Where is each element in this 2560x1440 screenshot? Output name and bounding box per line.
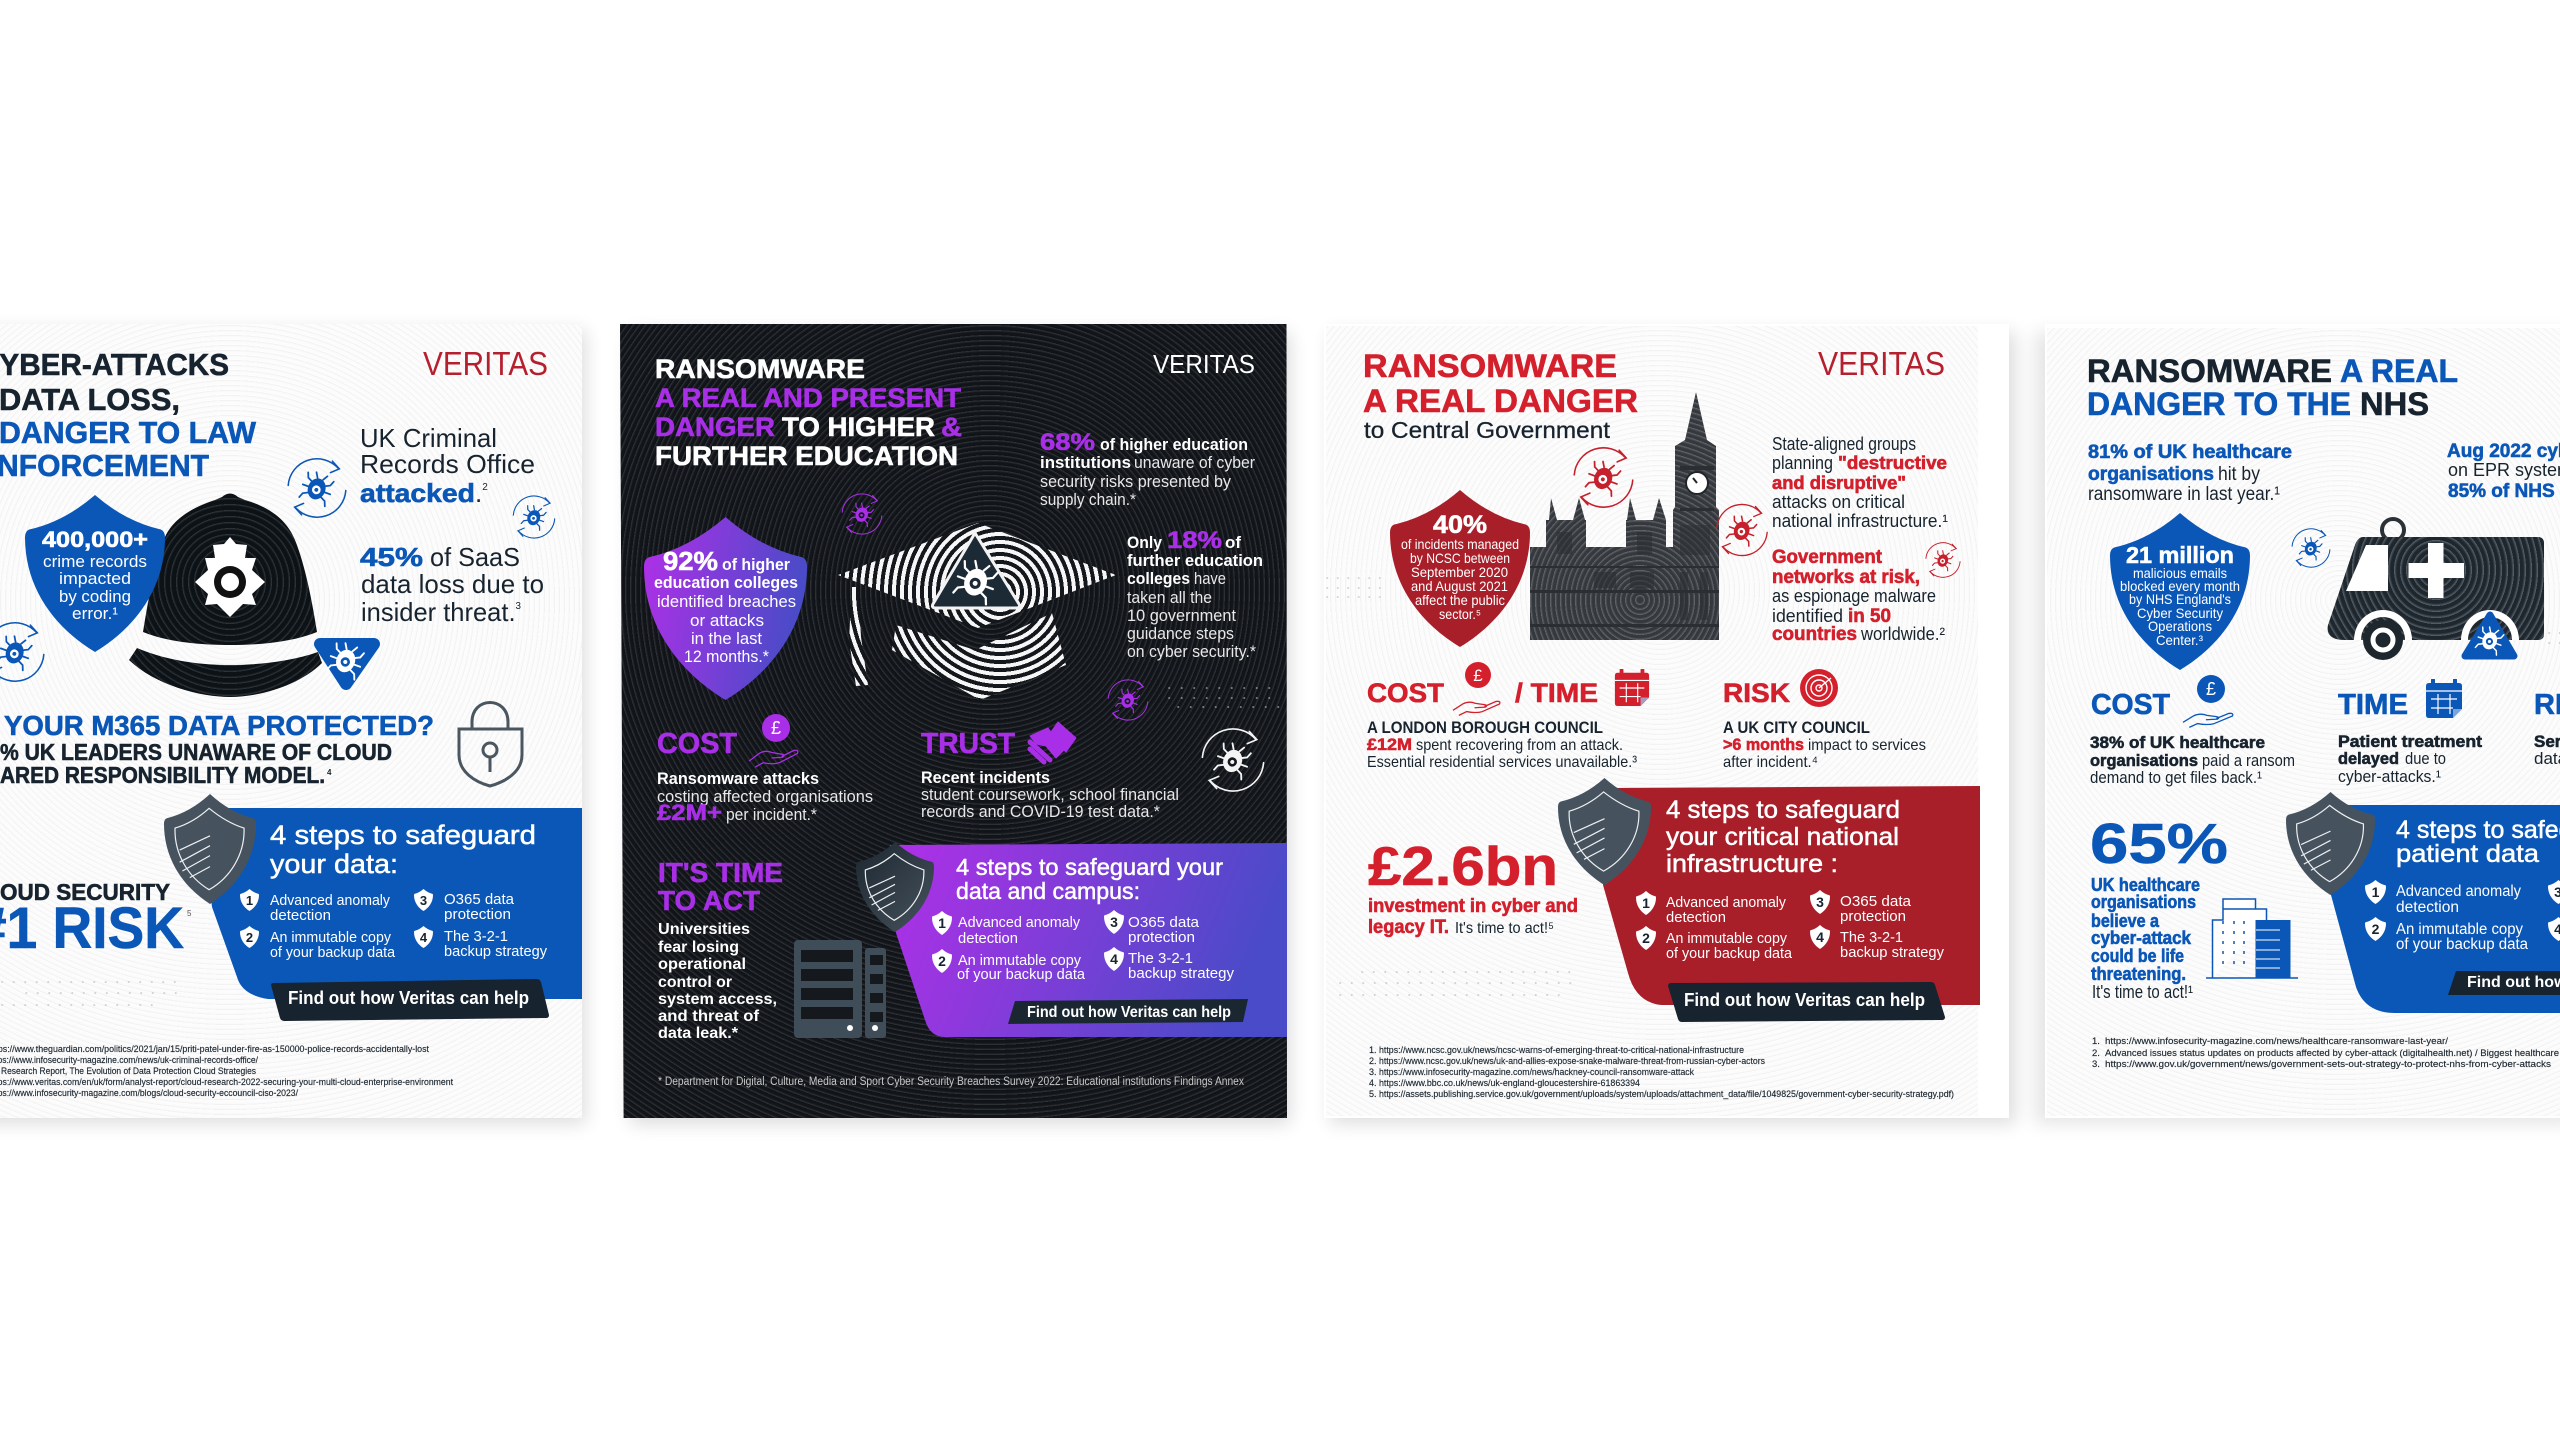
panel: safeguard steps: An immutable copy (1666, 930, 1787, 947)
panel: central government infographic (1324, 324, 2016, 1124)
text block: government networks: as espionage malware (1772, 586, 1936, 606)
footnotes: https://www.infosecurity-magazine.com/news/healthcare-ransomware-last-year/ (2105, 1036, 2448, 1047)
title: DANGER TO LAW (0, 415, 257, 450)
text block: 18 percent: 18% (1167, 527, 1222, 554)
section: cost: demand to get files back.¹ (2090, 768, 2262, 787)
text block: records office attacked: UK Criminal (360, 423, 497, 453)
icon: warning triangle with bug (320, 640, 374, 684)
title: & (941, 412, 962, 442)
title: to Central Government (1364, 417, 1611, 443)
icon: padlock (459, 702, 522, 786)
text block: 68 percent: supply chain.* (1040, 490, 1136, 509)
shield: crime records stat: impacted (59, 569, 131, 588)
panel: safeguard steps: The 3-2-1 (1840, 929, 1903, 946)
section: time to act: fear losing (658, 939, 739, 956)
text block: 18 percent: Only (1127, 533, 1162, 552)
section: time to act: IT'S TIME (658, 857, 783, 888)
section: time (2338, 680, 2482, 786)
text block: 18 percent: of (1225, 533, 1241, 552)
panel: safeguard steps: An immutable copy (2396, 921, 2523, 938)
text block: 18 percent: guidance steps (1127, 624, 1234, 643)
panel: NHS infographic (2035, 324, 2560, 1124)
text block: UK leaders unaware: ARED RESPONSIBILITY MODEL. (0, 762, 325, 788)
panel: safeguard steps: 4 (420, 930, 428, 945)
icon: Big Ben and Parliament (1530, 392, 1719, 640)
panel: safeguard steps: detection (958, 930, 1018, 947)
panel: safeguard steps (856, 842, 1287, 1037)
title (2087, 353, 2458, 422)
title: NHS (2360, 386, 2429, 422)
section: time: TIME (2338, 689, 2408, 721)
shield: 40 percent: sector.⁵ (1439, 606, 1481, 622)
title: DANGER (655, 412, 775, 442)
title: TO HIGHER (782, 412, 935, 442)
section: time: Patient treatment (2338, 732, 2482, 751)
text block: 18 percent (1127, 527, 1263, 661)
icon: bug ring white (1202, 729, 1264, 791)
shield: 21 million: 21 million (2126, 542, 2234, 568)
section: time to act: operational (658, 956, 746, 973)
section: cost and time: / TIME (1515, 678, 1598, 708)
text block: 65 percent (2090, 812, 2228, 1002)
text block: 81 percent: hit by (2218, 464, 2260, 485)
shield: 92 percent: of higher (722, 555, 790, 574)
panel: safeguard steps: of your backup data (957, 966, 1086, 983)
text block: government networks: identified (1772, 606, 1843, 626)
text block: records office attacked: attacked . (360, 478, 482, 508)
text block: government networks: Government (1772, 547, 1883, 568)
icon: bug ring (288, 459, 346, 517)
panel: safeguard steps: 4 (1816, 929, 1824, 945)
title: DANGER TO THE (2087, 386, 2351, 422)
text block: government networks: in 50 (1848, 606, 1891, 627)
panel: safeguard steps: 3 (420, 893, 427, 908)
icon: bug ring (1574, 448, 1633, 507)
footnotes: Advanced issues status updates on products affected by cyber-attack (digitalhealth.net) / Biggest healthcare (2105, 1048, 2559, 1059)
logo: Veritas: VERITAS (1818, 345, 1945, 382)
text block: UK leaders unaware: 4 (327, 768, 332, 777)
icon: building (2206, 899, 2298, 978)
panel: safeguard steps (164, 794, 582, 1021)
text block: state-aligned groups: national infrastructure.¹ (1772, 511, 1948, 531)
footnotes: 2. (2092, 1048, 2100, 1059)
panel: safeguard steps: 4 steps to safeguard your (956, 854, 1223, 880)
section: cost (2090, 675, 2295, 787)
panel: safeguard steps: The 3-2-1 (444, 928, 508, 945)
panel: safeguard steps: O365 data (1128, 914, 1200, 931)
footnotes: https://www.ncsc.gov.uk/news/uk-and-allies-expose-snake-malware-threat-from-russian-cyber-actors (1379, 1056, 1765, 1066)
text block: 65 percent: 65% (2090, 812, 2228, 876)
section: time to act (658, 857, 783, 1042)
section: cost and time: £ (1473, 666, 1483, 685)
panel: safeguard steps: 1 (2372, 884, 2380, 900)
footnotes: https://www.theguardian.com/politics/2021/jan/15/priti-patel-under-fire-as-150000-police-records-accidentally-lost (0, 1044, 429, 1054)
text block: SaaS data loss: 3 (516, 601, 521, 612)
footnotes: 3. (1369, 1067, 1377, 1077)
panel: safeguard steps: An immutable copy (270, 929, 391, 946)
text block: 65 percent: organisations (2091, 892, 2196, 912)
icon: ambulance (2328, 519, 2544, 660)
panel: safeguard steps: 1 (246, 893, 253, 908)
shield: crime records stat: error.¹ (72, 604, 118, 623)
text block: 18 percent: on cyber security.* (1127, 642, 1256, 661)
panel: safeguard steps: 2 (2372, 921, 2380, 937)
section: time: delayed (2338, 749, 2399, 768)
text block: records office attacked: Records Office (360, 449, 535, 479)
section: trust: student coursework, school financial (921, 785, 1179, 804)
panel: law enforcement infographic (0, 324, 586, 1124)
footnotes (2092, 1036, 2559, 1070)
title: DATA LOSS, (0, 382, 180, 417)
footnotes: https://www.gov.uk/government/news/government-sets-out-strategy-to-protect-nhs-from-cyber-attacks (2105, 1059, 2551, 1070)
shield: 40 percent: September 2020 (1411, 564, 1508, 580)
text block: 68 percent (1040, 429, 1255, 509)
panel: safeguard steps: Advanced anomaly (270, 892, 390, 909)
section: trust: TRUST (921, 728, 1015, 760)
section: time: due to (2405, 749, 2446, 768)
shield: 40 percent: 40% (1433, 511, 1487, 539)
panel: safeguard steps: 1 (1642, 895, 1650, 911)
section: cost: £ (771, 718, 781, 738)
panel: safeguard steps: Find out how Veritas can help (1684, 990, 1925, 1010)
section: cost and time: COST (1367, 678, 1445, 708)
panel: safeguard steps: 4 steps to safeguard (1666, 796, 1900, 824)
footnotes (1369, 1045, 1954, 1099)
icon: bug ring (2292, 529, 2330, 567)
shield: 92 percent: identified breaches (657, 592, 796, 611)
text block: 65 percent: threatening. (2091, 964, 2186, 984)
text block: 2.6bn investment: legacy IT. (1368, 917, 1449, 938)
text block: Aug 2022 attack: 85% of NHS (2448, 481, 2555, 502)
shield: crime records stat: 400,000+ (42, 527, 148, 552)
shield: 92 percent: 12 months.* (684, 647, 769, 666)
footnotes: 1. (1369, 1045, 1377, 1055)
section: cost: per incident.* (726, 805, 817, 824)
section: time to act: TO ACT (658, 885, 760, 916)
panel: safeguard steps: detection (1666, 909, 1726, 926)
panel: safeguard steps (1558, 778, 1980, 1022)
section: cost and time: Essential residential services unavailable.³ (1367, 754, 1638, 771)
footnotes (0, 1044, 453, 1098)
section: risk: impact to services (1808, 737, 1926, 754)
text block: 68 percent: security risks presented by (1040, 472, 1231, 491)
shield: 40 percent: affect the public (1415, 592, 1505, 608)
panel: safeguard steps: protection (444, 906, 511, 923)
title: FURTHER EDUCATION (655, 441, 958, 471)
text block: state-aligned groups: attacks on critical (1772, 492, 1905, 512)
panel: safeguard steps: 2 (938, 953, 946, 969)
panel: safeguard steps: Find out how Veritas can help (288, 987, 529, 1008)
title: A REAL (2340, 353, 2458, 389)
panel: safeguard steps (2286, 792, 2560, 1013)
title (1363, 348, 1638, 443)
shield: crime records stat (25, 495, 165, 652)
logo: Veritas: VERITAS (423, 345, 548, 382)
panel: safeguard steps: of your backup data (1666, 945, 1793, 962)
section: time to act: system access, (658, 991, 777, 1008)
shield: 21 million (2110, 513, 2250, 670)
text block: 81 percent: organisations (2088, 464, 2214, 485)
section: risk (2534, 689, 2560, 768)
footnotes: https://www.veritas.com/en/uk/form/analyst-report/cloud-research-2022-securing-your-multi-cloud-enterprise-environment (0, 1077, 453, 1087)
section: risk: RISK (1723, 678, 1791, 708)
panel: safeguard steps: your critical national (1666, 823, 1899, 851)
text block: state-aligned groups: and disruptive" (1772, 473, 1906, 493)
panel: safeguard steps: data and campus: (956, 878, 1140, 904)
section: time to act: control or (658, 974, 732, 991)
section: cost: 38% of UK healthcare (2090, 733, 2265, 752)
icon: server racks (794, 940, 886, 1038)
text block: SaaS data loss (360, 542, 544, 627)
text block: 65 percent: UK healthcare (2091, 875, 2200, 895)
shield: 21 million: Operations (2148, 618, 2212, 634)
text block: 68 percent: 68% (1040, 429, 1095, 456)
text block: UK leaders unaware: % UK LEADERS UNAWARE OF CLOUD (0, 739, 392, 765)
panel: safeguard steps: Find out how Veritas can help (1027, 1004, 1231, 1021)
text block: government networks: countries (1772, 624, 1857, 645)
panel: safeguard steps: 4 steps to safeguard (270, 820, 536, 850)
footnotes: 4. (1369, 1078, 1377, 1088)
shield: 21 million: malicious emails (2133, 565, 2227, 581)
shield: 40 percent: of incidents managed (1401, 536, 1519, 552)
panel: safeguard steps: backup strategy (1840, 944, 1944, 961)
text block: 65 percent: It's time to act!¹ (2092, 982, 2193, 1002)
text block: 68 percent: unaware of cyber (1134, 453, 1255, 472)
text block: records office attacked: 2 (482, 482, 488, 493)
title: A REAL DANGER (1363, 383, 1638, 419)
logo: Veritas: VERITAS (1153, 349, 1255, 379)
icon: bug ring small (1926, 543, 1960, 577)
panel: safeguard steps: 2 (1642, 930, 1650, 946)
footnotes: 5. (1369, 1089, 1377, 1099)
text block: cloud security risk: 5 (187, 909, 192, 918)
shield: 21 million: by NHS England's (2129, 591, 2231, 607)
section: cost: £2M+ (657, 800, 722, 825)
shield: 92 percent: in the last (691, 629, 762, 648)
section: trust: records and COVID-19 test data.* (921, 802, 1160, 821)
shield: 92 percent: education colleges (654, 573, 798, 592)
text block: 68 percent: of higher education (1100, 435, 1248, 454)
icon: bug ring left (0, 623, 44, 681)
text block: 65 percent: cyber-attack (2091, 928, 2192, 948)
section: cost: organisations (2090, 751, 2198, 770)
text block: UK leaders unaware (0, 739, 392, 788)
title: RANSOMWARE (1363, 348, 1617, 384)
panel: safeguard steps: patient data (2396, 840, 2539, 868)
icon: police helmet (129, 494, 322, 697)
shield: crime records stat: by coding (59, 587, 131, 606)
panel: safeguard steps: 3 (1110, 914, 1118, 930)
footnotes: https://assets.publishing.service.gov.uk/government/uploads/system/uploads/attachment_data/file/1049825/government-cyber-security-strategy.pdf) (1379, 1089, 1954, 1099)
footnotes: https://www.bbc.co.uk/news/uk-england-gloucestershire-61863394 (1379, 1078, 1640, 1088)
text block: state-aligned groups: planning (1772, 453, 1833, 473)
heading: M365: YOUR M365 DATA PROTECTED? (4, 710, 434, 741)
panel: safeguard steps: 1 (938, 915, 946, 931)
section: cost: COST (657, 728, 737, 760)
text block: 2.6bn investment: £2.6bn (1368, 835, 1558, 897)
icon: bug ring purple (842, 494, 882, 534)
section: cost: COST (2091, 689, 2170, 721)
footnotes: 1. (2092, 1036, 2100, 1047)
text block: 65 percent: believe a (2091, 911, 2160, 931)
section: cost: Ransomware attacks (657, 769, 819, 788)
text block: government networks: worldwide.² (1860, 624, 1945, 644)
section: cost and time (1367, 662, 1649, 771)
text block: 18 percent: have (1194, 569, 1226, 588)
section: trust: Recent incidents (921, 768, 1050, 787)
text block: SaaS data loss: insider threat. (361, 597, 519, 627)
text block: cloud security risk: OUD SECURITY (0, 879, 170, 905)
footnotes: 2. (1369, 1056, 1377, 1066)
title (0, 347, 257, 483)
text block: 81 percent: 81% of UK healthcare (2088, 442, 2292, 463)
section: time to act: and threat of (658, 1008, 760, 1025)
shield: 21 million: Cyber Security (2137, 605, 2223, 621)
panel: safeguard steps: infrastructure : (1666, 850, 1838, 878)
shield: crime records stat: crime records (43, 552, 147, 571)
text block: SaaS data loss: data loss due to (361, 569, 544, 599)
panel: safeguard steps: detection (2396, 899, 2459, 916)
text block: government networks (1772, 547, 1945, 645)
text block: 18 percent: further education (1127, 551, 1263, 570)
section: cost (657, 714, 873, 825)
section: cost and time: £12M (1367, 735, 1412, 754)
panel: safeguard steps: Advanced anomaly (958, 914, 1080, 931)
section: risk: A UK CITY COUNCIL (1723, 719, 1870, 737)
shield: 40 percent: and August 2021 (1411, 578, 1508, 594)
panel: safeguard steps: protection (1128, 929, 1195, 946)
panel: safeguard steps: 2 (246, 930, 253, 945)
text block: state-aligned groups: "destructive (1838, 453, 1947, 473)
section: cost: paid a ransom (2202, 751, 2295, 770)
title: A REAL AND PRESENT (655, 383, 962, 413)
text block: 2.6bn investment (1368, 835, 1578, 938)
section: time: cyber-attacks.¹ (2338, 767, 2441, 786)
shield: 92 percent (644, 517, 807, 700)
panel: safeguard steps: O365 data (1840, 893, 1912, 910)
panel: safeguard steps: protection (1840, 908, 1906, 925)
panel: safeguard steps: O365 data (444, 891, 515, 908)
icon: graduation cap (838, 523, 1116, 700)
text block: state-aligned groups (1772, 434, 1948, 531)
panel: safeguard steps: The 3-2-1 (1128, 950, 1193, 967)
panel: safeguard steps: An immutable copy (958, 952, 1081, 969)
text block: 18 percent: taken all the (1127, 588, 1212, 607)
panel: safeguard steps: of your backup data (2396, 936, 2528, 953)
text block: Aug 2022 attack (2447, 441, 2560, 502)
text block: 18 percent: colleges (1127, 569, 1190, 588)
text block: 2.6bn investment: investment in cyber and (1368, 896, 1578, 917)
icon: bug ring purple lower (1108, 680, 1148, 720)
icon: bug ring small (513, 496, 555, 538)
shield: 92 percent: 92% (663, 546, 718, 576)
section: cost: costing affected organisations (657, 787, 873, 806)
panel: safeguard steps: of your backup data (270, 944, 396, 961)
footnotes: https://www.infosecurity-magazine.com/news/hackney-council-ransomware-attack (1379, 1067, 1694, 1077)
section: cost: £ (2206, 679, 2216, 699)
title (655, 354, 962, 471)
panel: safeguard steps: backup strategy (444, 943, 547, 960)
text block: 81 percent: ransomware in last year.¹ (2088, 484, 2280, 505)
footnotes: Research Report, The Evolution of Data Protection Cloud Strategies (1, 1066, 256, 1076)
text block: 18 percent: 10 government (1127, 606, 1236, 625)
footnotes: 3. (2092, 1059, 2100, 1070)
panel: safeguard steps: 4 (1110, 951, 1118, 967)
footnotes: https://www.ncsc.gov.uk/news/ncsc-warns-of-emerging-threat-to-critical-national-infrastructure (1379, 1045, 1744, 1055)
shield: 21 million: Center.³ (2156, 632, 2203, 648)
text block: 2.6bn investment: It's time to act!⁵ (1455, 920, 1554, 937)
text block: 68 percent: institutions (1040, 453, 1131, 472)
shield: 40 percent (1390, 490, 1530, 647)
title: RANSOMWARE (2087, 353, 2332, 389)
text block: government networks: networks at risk, (1772, 567, 1920, 588)
panel: safeguard steps: backup strategy (1128, 965, 1234, 982)
section: risk: after incident.⁴ (1723, 754, 1818, 771)
section: trust (921, 722, 1179, 821)
text block: 65 percent: could be life (2091, 946, 2184, 966)
section: risk: >6 months (1723, 735, 1804, 754)
section: cost and time: A LONDON BOROUGH COUNCIL (1367, 719, 1603, 737)
text block: SaaS data loss: of SaaS (430, 542, 520, 572)
section: cost and time: spent recovering from an attack. (1416, 737, 1623, 754)
panel: safeguard steps: your data: (270, 849, 398, 879)
panel: higher and further education infographic (620, 324, 1290, 1124)
panel: safeguard steps: detection (270, 907, 331, 924)
shield: 40 percent: by NCSC between (1410, 550, 1510, 566)
section: time to act: Universities (658, 921, 750, 938)
text block: records office attacked (360, 423, 535, 508)
shield: 21 million: blocked every month (2120, 578, 2240, 594)
text block: 81 percent (2088, 442, 2292, 505)
panel: safeguard steps: Advanced anomaly (1666, 894, 1786, 911)
section: time to act: data leak.* (658, 1025, 739, 1042)
panel: safeguard steps: 3 (1816, 894, 1824, 910)
text block: state-aligned groups: State-aligned groups (1772, 434, 1916, 454)
icon: bug ring (1717, 504, 1767, 556)
title: RANSOMWARE (655, 354, 865, 384)
text block: SaaS data loss: 45% (360, 542, 423, 572)
footnote: * Department for Digital, Culture, Media and Sport Cyber Security Breaches Survey 2022: Educational institutions Findings Annex (658, 1076, 1244, 1088)
shield: 92 percent: or attacks (690, 611, 764, 630)
panel: safeguard steps: Advanced anomaly (2396, 883, 2521, 900)
section: risk (1723, 669, 1926, 771)
